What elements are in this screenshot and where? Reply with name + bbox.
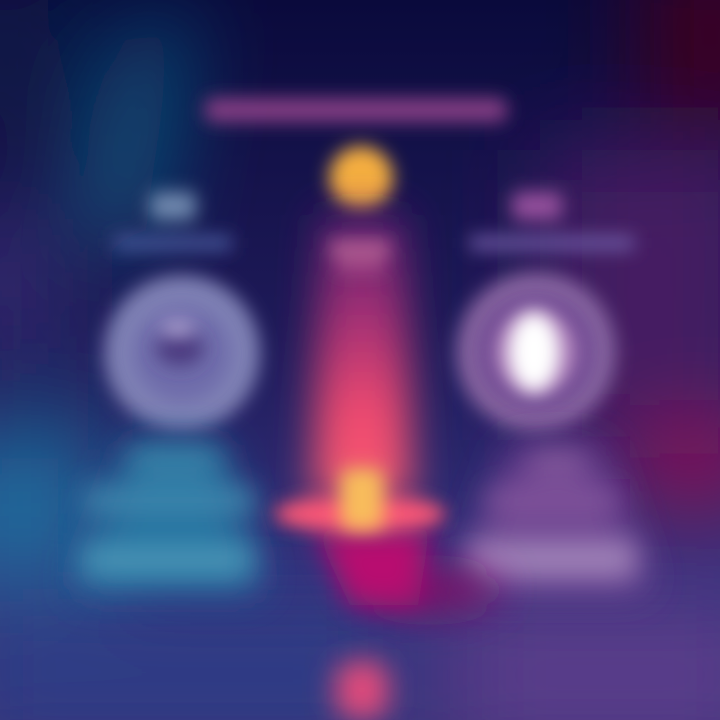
- icon: flame glow: [340, 468, 384, 530]
- bowl base: [274, 495, 500, 612]
- panel: left circle: [104, 275, 260, 431]
- title bar: [205, 98, 507, 122]
- panel: right circle: [456, 272, 616, 432]
- central label: [330, 242, 390, 270]
- panel: right text block: [455, 445, 650, 590]
- right heading: [470, 192, 634, 250]
- left heading: [114, 192, 232, 250]
- central light beam: [312, 215, 412, 500]
- reflection: [335, 660, 389, 720]
- icon: sun: [329, 146, 393, 210]
- panel: left text block: [75, 445, 262, 590]
